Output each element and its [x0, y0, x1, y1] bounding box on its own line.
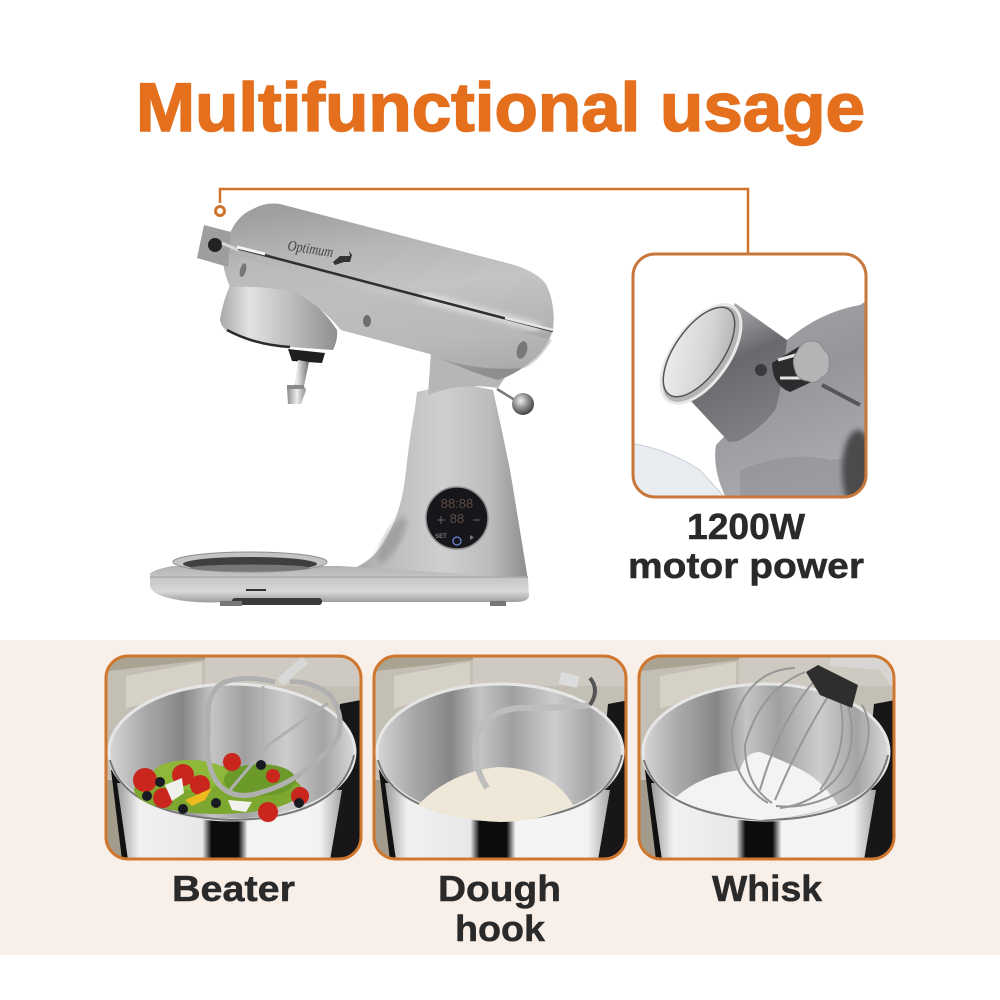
control panel: SET: [435, 534, 447, 540]
control panel: 88: [450, 511, 464, 526]
panel: motor close-up: [633, 254, 874, 510]
base slot icon: [246, 589, 266, 591]
dough hook label: Dough: [438, 868, 561, 909]
neck: [428, 352, 510, 395]
cylinder disc: [660, 303, 742, 405]
translucent bowl: [634, 444, 724, 496]
bowl seat: [173, 552, 327, 572]
knob: [772, 346, 810, 392]
chrome groove line: [237, 248, 553, 331]
callout connector line with dot: [216, 189, 748, 254]
mixer head: [223, 204, 554, 380]
dough hook: [475, 678, 595, 788]
whipped cream: [675, 752, 838, 820]
title: Multifunctional usage: [136, 69, 865, 146]
attachments band: [0, 640, 1000, 955]
whisk label: Whisk: [712, 868, 823, 909]
front knob: [197, 225, 238, 267]
control panel: 88:88: [441, 496, 473, 511]
mixer column: [340, 386, 528, 598]
salad: [133, 753, 309, 822]
dough hook label: [438, 868, 561, 949]
mixer product image: [150, 204, 554, 606]
attachment shaft: [287, 349, 325, 404]
mixer base: [150, 566, 529, 602]
panel: whisk photo: [634, 650, 904, 865]
control panel: [426, 487, 488, 549]
tilt lever ball: [497, 389, 534, 415]
mixer body: [715, 300, 868, 500]
dough hook label: hook: [455, 908, 546, 949]
motor power label: 1200W: [687, 506, 805, 547]
wire whisk: [732, 668, 869, 808]
logo: Optimum: [286, 238, 334, 261]
dough: [418, 767, 573, 822]
flat beater: [207, 660, 340, 796]
beater label: Beater: [172, 868, 295, 909]
screw holes: [363, 315, 371, 327]
panel: dough hook photo: [368, 650, 638, 865]
whisk hub: [806, 665, 858, 708]
motor cylinder: [690, 303, 787, 442]
motor power label: motor power: [628, 545, 864, 586]
motor power label: [628, 506, 864, 586]
panel: beater photo: [100, 650, 370, 865]
attachment hub: [220, 285, 337, 350]
